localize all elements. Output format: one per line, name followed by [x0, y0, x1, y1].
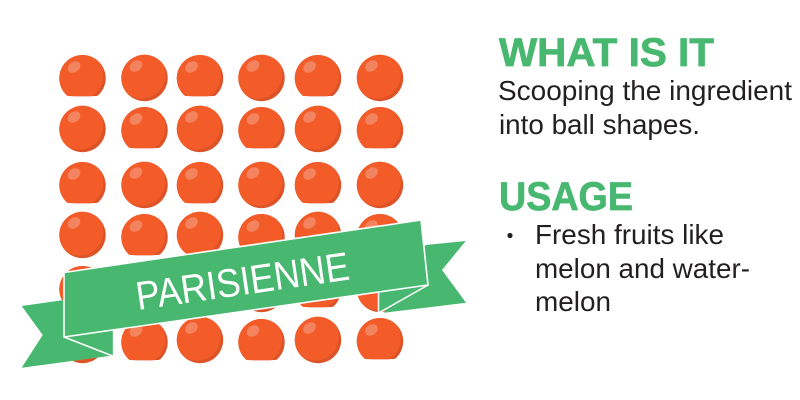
infographic canvas	[22, 38, 792, 368]
left ribbon tail	[22, 300, 113, 368]
usage bullet list: melon	[535, 286, 611, 317]
right ribbon tail	[384, 241, 466, 313]
heading: what is it: WHAT IS IT	[499, 31, 714, 75]
description text	[498, 75, 792, 140]
usage bullet list	[507, 219, 750, 317]
main ribbon band	[64, 220, 428, 337]
description text: Scooping the ingredient	[498, 75, 792, 106]
description text: into ball shapes.	[499, 109, 700, 140]
usage bullet list: melon and water-	[535, 253, 750, 284]
fold crease lines	[64, 285, 428, 356]
right fold	[378, 285, 428, 313]
usage bullet list: Fresh fruits like	[535, 219, 724, 250]
ribbon banner	[22, 220, 466, 368]
left fold	[64, 331, 113, 356]
banner label: PARISIENNE	[133, 245, 352, 319]
heading: usage: USAGE	[499, 175, 633, 219]
grid of orange melon balls	[55, 51, 403, 364]
